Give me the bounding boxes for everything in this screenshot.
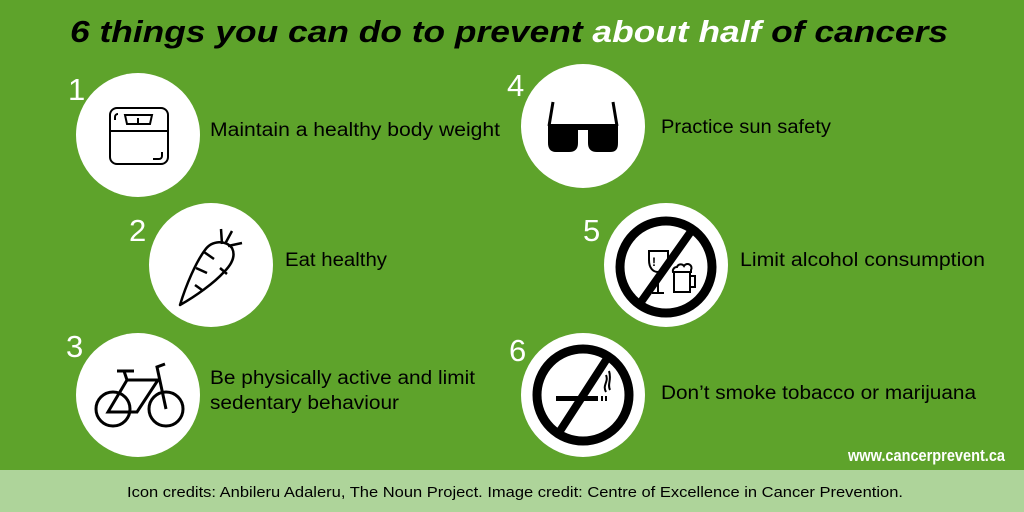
item 1: body weight <box>68 72 501 197</box>
icon: no alcohol: ! <box>652 255 656 269</box>
text: Practice sun safety <box>661 117 832 138</box>
number 6: 6 <box>509 333 526 368</box>
icon: bicycle <box>76 333 200 457</box>
item 5: alcohol <box>583 203 985 327</box>
item 3: physical activity: sedentary behaviour <box>210 393 400 414</box>
text: Maintain a healthy body weight <box>210 120 501 141</box>
icon: carrot <box>149 203 273 327</box>
text: Be physically active and limit <box>210 368 476 389</box>
number 5: 5 <box>583 213 600 248</box>
number 4: 4 <box>507 68 524 103</box>
footer credits band <box>0 470 1024 512</box>
icon: no smoking <box>521 333 645 457</box>
number 3: 3 <box>66 329 83 364</box>
icon: sunglasses <box>521 64 645 188</box>
text: Don’t smoke tobacco or marijuana <box>661 383 976 404</box>
title: 6 things you can do to prevent about half of cancers <box>70 14 948 49</box>
item 6: smoking <box>509 333 976 457</box>
icon: no alcohol <box>604 203 728 327</box>
item 3: physical activity <box>66 329 476 457</box>
text: Limit alcohol consumption <box>740 250 985 271</box>
item 4: sun safety <box>507 64 832 188</box>
number 1: 1 <box>68 72 85 107</box>
icon: scale <box>76 73 200 197</box>
number 2: 2 <box>129 213 146 248</box>
text: Eat healthy <box>285 250 388 271</box>
footer credits band: Icon credits: Anbileru Adaleru, The Noun Project. Image credit: Centre of Excellence in Cancer Prevention. <box>127 484 903 501</box>
item 2: eat healthy <box>129 203 388 327</box>
